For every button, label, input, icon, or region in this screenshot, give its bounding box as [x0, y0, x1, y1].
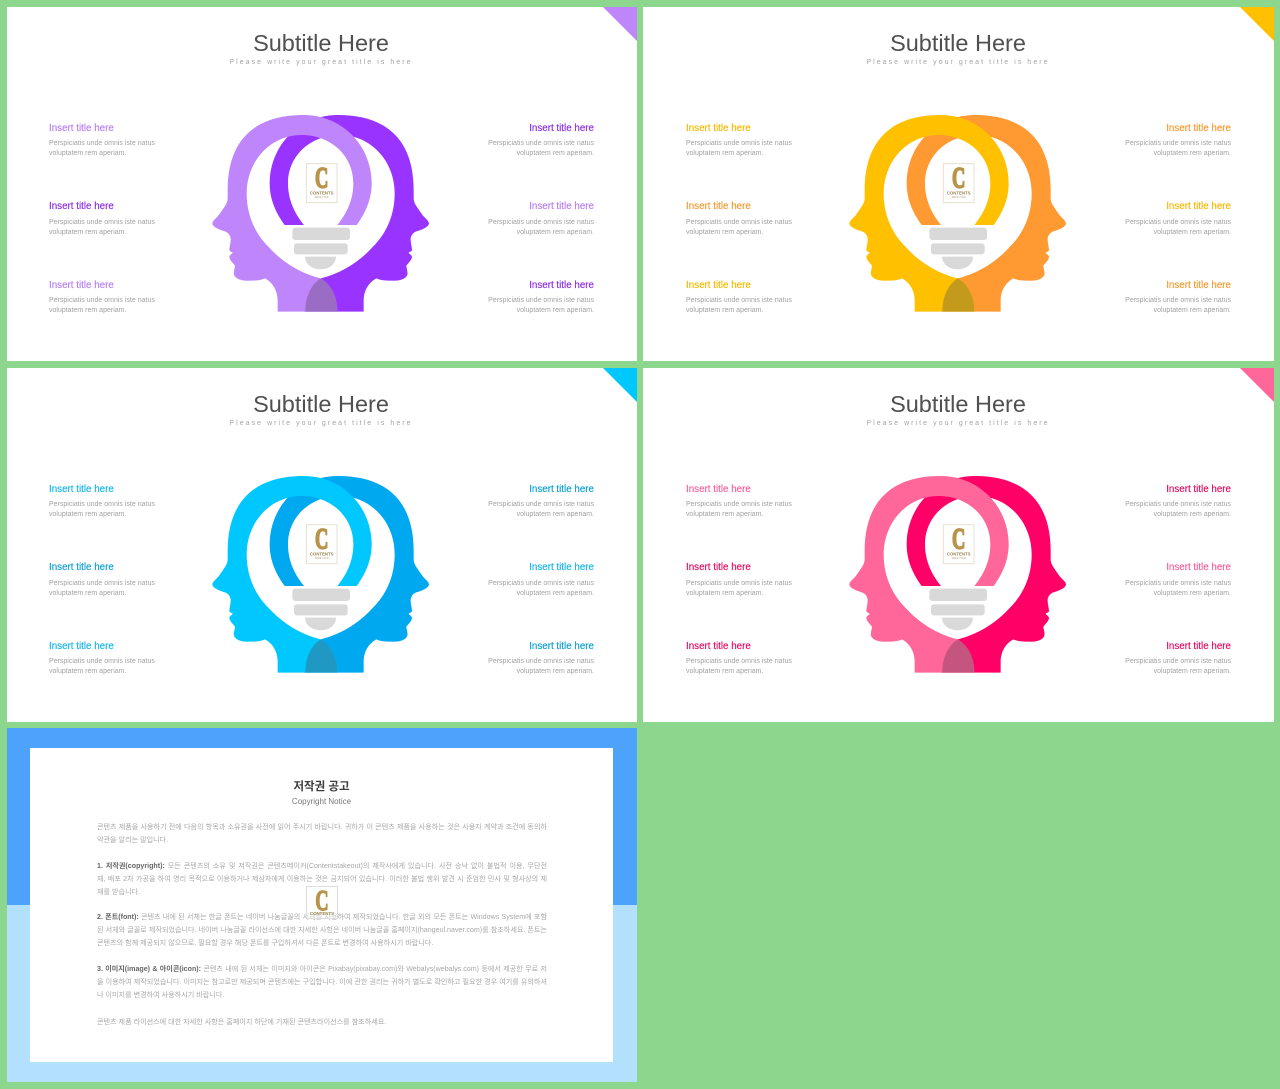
text block: right 1: voluptatem rem aperiam. [517, 511, 594, 518]
subheading: Please write your great title is here [866, 420, 1050, 427]
text block: right 1: Insert title here [529, 484, 594, 494]
text block: left 2: Insert title here [686, 562, 751, 573]
text block: left 1: Perspiciatis unde omnis iste natus [49, 140, 155, 147]
text block: right 2: voluptatem rem aperiam. [1154, 590, 1231, 597]
text block: left 2: Perspiciatis unde omnis iste natus [686, 580, 792, 586]
text block: right 3: voluptatem rem aperiam. [517, 307, 594, 314]
text block: left 2: Insert title here [49, 201, 114, 212]
corner triangle [603, 7, 637, 41]
text block: right 3 [488, 280, 594, 314]
icon: two heads forming a light bulb [849, 115, 1066, 312]
notice body text: 나 이미지를 변경하여 사용하시기 바랍니다. [97, 991, 224, 999]
icon: two heads forming a light bulb: CONTENTS [310, 551, 334, 556]
icon: two heads forming a light bulb: MAKE YOUR [315, 557, 329, 560]
subheading: Please write your great title is here [229, 420, 413, 427]
notice title: 저작권 공고 [293, 781, 350, 793]
text block: left 3: Insert title here [686, 280, 751, 290]
text block: left 2 [686, 562, 792, 597]
text block: left 2: voluptatem rem aperiam. [686, 590, 763, 597]
notice subtitle: Copyright Notice [292, 797, 351, 806]
text block: left 3 [49, 640, 155, 675]
text block: left 1 [49, 122, 155, 157]
corner triangle [1240, 7, 1274, 41]
text block: right 3: Insert title here [1166, 640, 1231, 652]
text block: left 1 [686, 484, 792, 518]
text block: right 1: Insert title here [529, 122, 594, 134]
text block: left 1: Perspiciatis unde omnis iste natus [49, 501, 155, 508]
text block: left 2: Perspiciatis unde omnis iste natus [686, 218, 792, 226]
notice body text: 된 서체와 글꼴로 제작되었습니다. 네이버 나눔글꼴 라이선스에 대한 자세한 사항은 네이버 나눔글꼴 홈페이지(hangeul.naver.com)를 참조하세요. 폰트는 [97, 926, 547, 934]
text block: left 1: voluptatem rem aperiam. [686, 511, 763, 518]
text block: right 2: Insert title here [1166, 562, 1231, 573]
text block: left 1: voluptatem rem aperiam. [686, 150, 763, 157]
text block: right 2: Perspiciatis unde omnis iste natus [1125, 580, 1231, 586]
text block: right 2: Insert title here [529, 201, 594, 212]
text block: right 2: voluptatem rem aperiam. [517, 590, 594, 597]
panel: purple slide [7, 7, 637, 361]
text block: left 3: voluptatem rem aperiam. [686, 307, 763, 314]
text block: left 3: voluptatem rem aperiam. [49, 307, 126, 314]
text block: right 1 [488, 122, 594, 157]
icon: two heads forming a light bulb: C [315, 163, 328, 195]
text block: left 3: Insert title here [49, 640, 114, 652]
icon: two heads forming a light bulb: C [315, 524, 328, 556]
panel: pink slide [644, 368, 1274, 722]
text block: right 3: voluptatem rem aperiam. [1154, 668, 1231, 675]
heading: Subtitle Here [890, 30, 1026, 56]
text block: right 2: Insert title here [1166, 201, 1231, 212]
text block: left 1: voluptatem rem aperiam. [49, 150, 126, 157]
notice body text: 을 이용하여 제작되었습니다. 이미지는 참고로만 제공되며 콘텐츠에는 구입합니다. 이에 관한 권리는 귀하가 별도로 확인하고 필요한 경우 여기를 유의하셔 [97, 978, 547, 986]
text block: left 1: Insert title here [49, 122, 114, 134]
notice body text: 2. 폰트(font): 콘텐츠 내에 된 서체는 한글 폰트는 네이버 나눔글꼴의 서체를 사용하여 제작되었습니다. 한글 외의 모든 폰트는 Windows System에 포함 [97, 913, 547, 921]
heading: Subtitle Here [253, 391, 389, 417]
text block: right 3: Perspiciatis unde omnis iste natus [488, 658, 594, 665]
text block: right 1: Perspiciatis unde omnis iste natus [1125, 501, 1231, 508]
text block: left 1: Insert title here [686, 484, 751, 494]
text block: right 2 [488, 562, 594, 597]
notice body text: 콘텐츠의 함께 제공되지 않으므로, 필요할 경우 해당 폰트를 구입하셔서 다른 폰트로 변경하여 사용하시기 바랍니다. [97, 939, 433, 947]
text block: right 1 [1125, 122, 1231, 157]
text block: right 1: voluptatem rem aperiam. [1154, 511, 1231, 518]
text block: left 3: Perspiciatis unde omnis iste natus [686, 658, 792, 665]
text block: left 2: Insert title here [49, 562, 114, 573]
logo mark: CONTENTS [310, 911, 334, 916]
text block: right 3 [1125, 280, 1231, 314]
text block: left 3: voluptatem rem aperiam. [49, 668, 126, 675]
icon: two heads forming a light bulb [212, 476, 429, 673]
text block: right 2: voluptatem rem aperiam. [517, 229, 594, 236]
icon: two heads forming a light bulb: MAKE YOUR [952, 196, 966, 199]
text block: left 3: Insert title here [686, 640, 751, 652]
text block: right 2: voluptatem rem aperiam. [1154, 229, 1231, 236]
icon: two heads forming a light bulb: C [952, 163, 965, 195]
text block: left 1: Insert title here [49, 484, 114, 494]
text block: left 2 [49, 562, 155, 597]
text block: right 2: Insert title here [529, 562, 594, 573]
text block: left 1: Perspiciatis unde omnis iste natus [686, 501, 792, 508]
icon: two heads forming a light bulb: CONTENTS [947, 551, 971, 556]
text block: left 3: Perspiciatis unde omnis iste natus [49, 297, 155, 304]
text block: left 1 [49, 484, 155, 518]
text block: right 2: Perspiciatis unde omnis iste natus [488, 218, 594, 226]
text block: left 2: Perspiciatis unde omnis iste natus [49, 218, 155, 226]
text block: right 1: Insert title here [1166, 122, 1231, 134]
text block: left 3: Insert title here [49, 280, 114, 290]
text block: right 3 [1125, 640, 1231, 675]
icon: two heads forming a light bulb: CONTENTS [310, 190, 334, 195]
notice body text: 약관을 알리는 말입니다. [97, 836, 168, 844]
text block: right 2: Perspiciatis unde omnis iste natus [488, 580, 594, 586]
text block: left 1: voluptatem rem aperiam. [49, 511, 126, 518]
text block: left 3 [686, 640, 792, 675]
text block: right 3: Perspiciatis unde omnis iste natus [488, 297, 594, 304]
text block: right 1: Insert title here [1166, 484, 1231, 494]
icon: two heads forming a light bulb [212, 115, 429, 312]
icon: two heads forming a light bulb: MAKE YOUR [315, 196, 329, 199]
subheading: Please write your great title is here [866, 59, 1050, 66]
text block: right 1 [488, 484, 594, 518]
text block: right 2 [1125, 562, 1231, 597]
notice body text: 콘텐츠 제품 라이선스에 대한 자세한 사항은 홈페이지 하단에 기재된 콘텐츠라이선스를 참조하세요. [97, 1018, 386, 1026]
text block: right 3: Perspiciatis unde omnis iste natus [1125, 658, 1231, 665]
icon: two heads forming a light bulb: MAKE YOUR [952, 557, 966, 560]
text block: left 3: Perspiciatis unde omnis iste natus [686, 297, 792, 304]
text block: left 1 [686, 122, 792, 157]
notice body text: 재, 배포 2차 가공을 하여 영리 목적으로 이용하거나 제삼자에게 이용하는 것은 금지되어 있습니다. 이러한 불법 행위 발견 시 준엄한 민사 및 형사상의 제 [97, 875, 547, 883]
text block: right 2: Perspiciatis unde omnis iste natus [1125, 218, 1231, 226]
text block: left 3: Perspiciatis unde omnis iste natus [49, 658, 155, 665]
text block: right 3 [488, 640, 594, 675]
panel: copyright notice [7, 728, 637, 1082]
text block: right 2 [1125, 201, 1231, 236]
text block: left 1: Perspiciatis unde omnis iste natus [686, 140, 792, 147]
text block: right 3: Perspiciatis unde omnis iste natus [1125, 297, 1231, 304]
panel: blue slide [7, 368, 637, 722]
text block: right 1: voluptatem rem aperiam. [1154, 150, 1231, 157]
text block: left 3: voluptatem rem aperiam. [686, 668, 763, 675]
text block: left 2: voluptatem rem aperiam. [49, 229, 126, 236]
text block: left 2: voluptatem rem aperiam. [686, 229, 763, 236]
text block: left 2: Insert title here [686, 201, 751, 212]
icon: two heads forming a light bulb: C [952, 524, 965, 556]
heading: Subtitle Here [253, 30, 389, 56]
icon: two heads forming a light bulb: CONTENTS [947, 190, 971, 195]
text block: right 2 [488, 201, 594, 236]
text block: right 1 [1125, 484, 1231, 518]
text block: right 1: Perspiciatis unde omnis iste natus [488, 140, 594, 147]
logo mark [306, 886, 338, 919]
text block: right 1: voluptatem rem aperiam. [517, 150, 594, 157]
text block: left 2: Perspiciatis unde omnis iste natus [49, 580, 155, 586]
text block: left 2 [686, 201, 792, 236]
text block: left 3 [49, 280, 155, 314]
text block: right 3: Insert title here [529, 280, 594, 290]
text block: right 3: voluptatem rem aperiam. [1154, 307, 1231, 314]
text block: right 3: voluptatem rem aperiam. [517, 668, 594, 675]
icon: two heads forming a light bulb [849, 476, 1066, 673]
subheading: Please write your great title is here [229, 59, 413, 66]
text block: right 1: Perspiciatis unde omnis iste natus [488, 501, 594, 508]
text block: left 2 [49, 201, 155, 236]
text block: left 1: Insert title here [686, 122, 751, 134]
notice card [30, 748, 613, 1062]
text block: left 3 [686, 280, 792, 314]
notice body text: 재를 받습니다. [97, 888, 140, 896]
panel: yellow slide [644, 7, 1274, 361]
text block: right 1: Perspiciatis unde omnis iste natus [1125, 140, 1231, 147]
notice body text [97, 823, 547, 1026]
corner triangle [603, 368, 637, 402]
text block: left 2: voluptatem rem aperiam. [49, 590, 126, 597]
heading: Subtitle Here [890, 391, 1026, 417]
text block: right 3: Insert title here [529, 640, 594, 652]
notice body text: 1. 저작권(copyright): 모든 콘텐츠의 소유 및 저작권은 콘텐츠메이커(Contentstakeout)의 제작사에게 있습니다. 사전 승낙 없이 불법적 이용, 무단전 [97, 862, 547, 870]
text block: right 3: Insert title here [1166, 280, 1231, 290]
corner triangle [1240, 368, 1274, 402]
logo mark: C [315, 885, 329, 917]
